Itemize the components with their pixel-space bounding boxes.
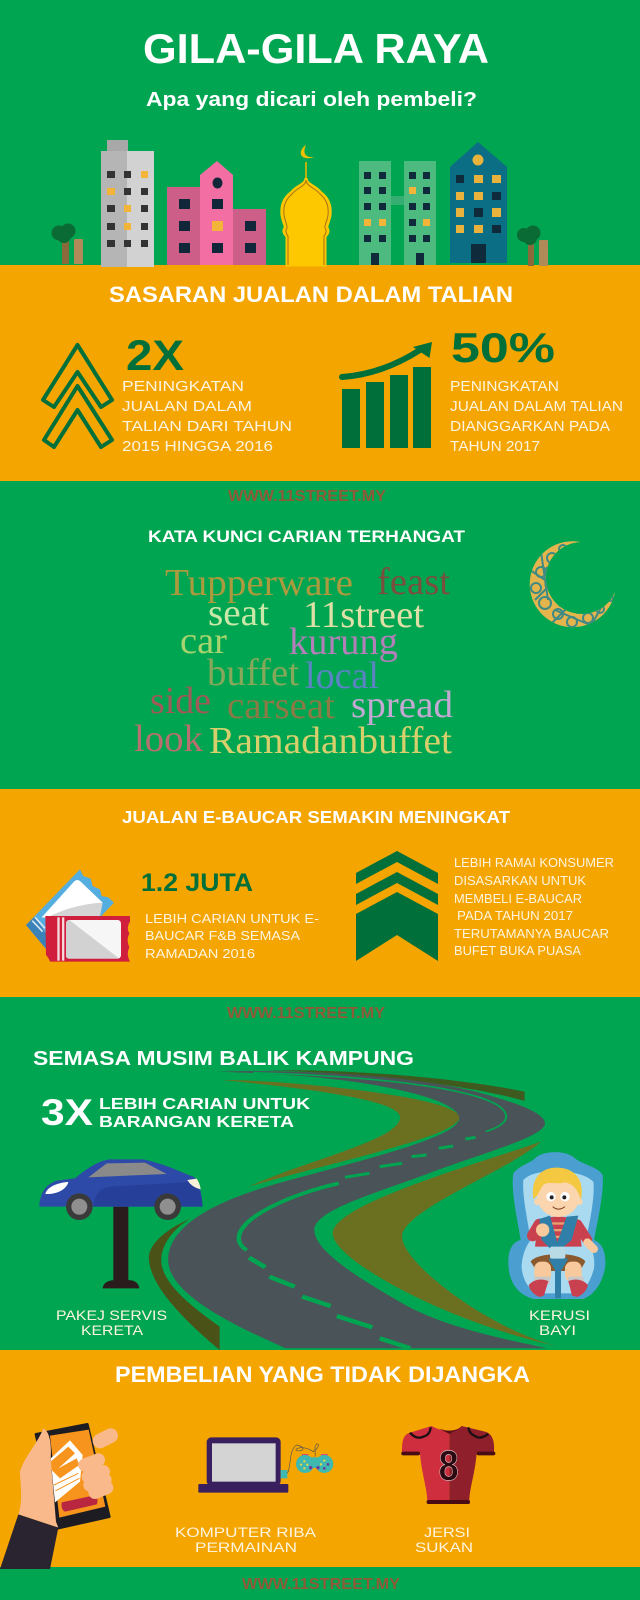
text: 1.2 juta description: LEBIH CARIAN UNTUK E- (145, 912, 319, 926)
heading: e-baucar: JUALAN E-BAUCAR SEMAKIN MENINGKAT (122, 807, 510, 827)
text: 3X description: LEBIH CARIAN UNTUK (99, 1096, 311, 1113)
word cloud: car (180, 620, 227, 662)
label: jersi sukan: JERSI (424, 1525, 470, 1540)
word cloud: 11street (303, 594, 424, 636)
text: 50% description: DIANGGARKAN PADA (450, 419, 610, 435)
word cloud: look (134, 718, 204, 760)
text: 50% description: JUALAN DALAM TALIAN (450, 399, 623, 415)
label: pakej servis kereta: PAKEJ SERVIS (56, 1308, 167, 1323)
icon: twin green towers (359, 161, 436, 265)
word cloud: Ramadanbuffet (209, 720, 452, 762)
icon: jersey number 8: 8 (439, 1442, 459, 1490)
label: pakej servis kereta: KERETA (81, 1323, 143, 1338)
heading: balik kampung: SEMASA MUSIM BALIK KAMPUNG (33, 1048, 414, 1070)
chart: rising bars with arrow (342, 342, 432, 448)
word cloud: Tupperware (165, 562, 353, 604)
text: 3X description: BARANGAN KERETA (99, 1114, 295, 1131)
label: komputer riba permainan: PERMAINAN (195, 1540, 297, 1555)
text: 50% description (450, 379, 623, 455)
illustration: winding road (149, 1070, 559, 1350)
heading: pembelian tidak dijangka: PEMBELIAN YANG TIDAK DIJANGKA (115, 1362, 530, 1387)
icon: double chevron outline (43, 345, 112, 447)
icon: mosque dome (282, 145, 330, 265)
text: konsumer description: TERUTAMANYA BAUCAR (454, 927, 609, 941)
url footer 3: WWW.11STREET.MY (242, 1576, 400, 1593)
label: kerusi bayi (529, 1308, 590, 1338)
text: 2X description (122, 379, 292, 455)
text: 1.2 juta description: BAUCAR F&B SEMASA (145, 929, 301, 943)
label: komputer riba permainan: KOMPUTER RIBA (175, 1525, 316, 1540)
text: konsumer description: MEMBELI E-BAUCAR (454, 892, 582, 906)
stat: 2X: 2X (126, 332, 184, 380)
word cloud: feast (377, 561, 450, 603)
word cloud (134, 561, 453, 762)
text: 3X description (99, 1096, 311, 1131)
icon: laptop with game controller (198, 1437, 333, 1493)
icon: jersey number 8 (401, 1426, 495, 1504)
url footer 1: WWW.11STREET.MY (228, 488, 386, 505)
panel: 1.2 juta stat (26, 869, 319, 962)
word cloud: carseat (227, 685, 335, 727)
icon: car on lift (39, 1159, 203, 1288)
text: konsumer description: LEBIH RAMAI KONSUMER (454, 856, 614, 870)
title: GILA-GILA RAYA (143, 25, 489, 72)
icon: teal house building (450, 142, 507, 263)
url footer 2: WWW.11STREET.MY (227, 1005, 385, 1022)
band: sasaran jualan (0, 265, 640, 481)
icon: ornate crescent moon (530, 541, 615, 628)
panel: 2X stat (43, 332, 292, 455)
band: e-baucar (0, 789, 640, 997)
word cloud: buffet (207, 652, 299, 694)
band: pembelian (0, 1350, 640, 1567)
text: 1.2 juta description: RAMADAN 2016 (145, 947, 255, 961)
icon: hand holding phone (0, 1424, 111, 1569)
word cloud: spread (351, 684, 453, 726)
icon: solid chevrons (356, 851, 438, 961)
word cloud: local (305, 655, 379, 697)
panel: konsumer e-baucar (356, 851, 614, 961)
text: 2X description: JUALAN DALAM (122, 399, 252, 415)
subtitle: Apa yang dicari oleh pembeli? (146, 89, 477, 111)
label: kerusi bayi: KERUSI (529, 1308, 590, 1323)
label: jersi sukan: SUKAN (415, 1540, 473, 1555)
text: 1.2 juta description (145, 912, 319, 961)
label: komputer riba permainan (175, 1525, 316, 1555)
word cloud: side (150, 680, 211, 722)
label: jersi sukan (415, 1525, 473, 1555)
icon: right tree (517, 226, 548, 266)
text: 2X description: PENINGKATAN (122, 379, 244, 395)
heading: kata kunci: KATA KUNCI CARIAN TERHANGAT (148, 527, 466, 546)
text: konsumer description: BUFET BUKA PUASA (454, 944, 582, 958)
label: kerusi bayi: BAYI (539, 1323, 576, 1338)
panel: 50% stat (342, 324, 623, 455)
text: konsumer description (454, 856, 614, 958)
word cloud: seat (208, 592, 269, 634)
stat: 3X: 3X (41, 1092, 93, 1133)
icon: grey tower (101, 140, 154, 267)
heading: sasaran jualan: SASARAN JUALAN DALAM TALIAN (109, 282, 513, 307)
icon: left tree (52, 224, 83, 264)
label: pakej servis kereta (56, 1308, 167, 1338)
skyline illustration (52, 140, 548, 267)
icon: baby in car seat (508, 1152, 605, 1299)
text: 50% description: PENINGKATAN (450, 379, 559, 395)
stat: 50%: 50% (451, 324, 555, 371)
icon: tickets (26, 869, 130, 962)
text: konsumer description: PADA TAHUN 2017 (457, 909, 573, 923)
text: 2X description: 2015 HINGGA 2016 (122, 439, 273, 455)
text: konsumer description: DISASARKAN UNTUK (454, 874, 587, 888)
icon: pink building (167, 161, 266, 265)
text: 50% description: TAHUN 2017 (450, 439, 540, 455)
stat: 1.2 juta: 1.2 JUTA (141, 869, 253, 897)
word cloud: kurung (289, 621, 398, 663)
text: 2X description: TALIAN DARI TAHUN (122, 419, 292, 435)
